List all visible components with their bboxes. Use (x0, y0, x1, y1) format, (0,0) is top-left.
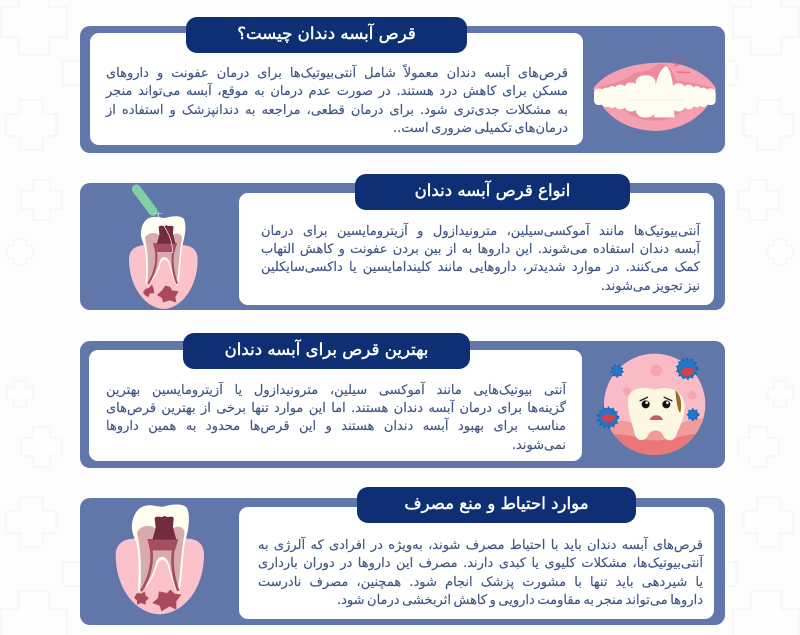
icon: infected tooth root (116, 504, 204, 614)
heading: موارد احتیاط و منع مصرف (404, 494, 589, 513)
body text: یا شیردهی باید تنها با مشورت پزشک انجام شود. همچنین، مصرف نادرست (258, 575, 703, 590)
body text: نمی‌شوند. (512, 438, 566, 453)
heading: انواع قرص آبسه دندان (415, 181, 570, 200)
body text: گزینه‌ها برای درمان آبسه دندان هستند. اما این موارد تنها برخی از بهترین قرص‌های (106, 401, 566, 416)
text card (90, 33, 583, 145)
body text: مناسب برای بهبود آبسه دندان هستند و این قرص‌ها محدود به همین داروها (106, 419, 566, 434)
body text: قرص‌های آبسه دندان معمولاً شامل آنتی‌بیوتیک‌ها برای درمان عفونت و داروهای (106, 66, 568, 81)
panel background (80, 341, 725, 468)
panel background (80, 26, 725, 153)
icon: tooth with root canal file (129, 184, 198, 309)
body text: قرص‌های آبسه دندان باید با احتیاط مصرف شوند، به‌ویژه در افرادی که آلرژی به (258, 538, 703, 553)
body text: به مشکلات جدی‌تری شود. برای درمان قطعی، مراجعه به دندانپزشک و استفاده از (106, 103, 568, 118)
text card (89, 350, 582, 461)
body text: آنتی‌بیوتیک‌ها مانند آموکسی‌سیلین، مترونیدازول و آزیترومایسین برای درمان (261, 224, 700, 238)
panel: precautions and contraindications (80, 487, 725, 625)
body text: نیز تجویز می‌شوند. (601, 279, 700, 294)
body text: آنتی‌بیوتیک‌ها، مشکلات کلیوی یا کبدی دارند. مصرف این داروها در دوران بارداری (258, 556, 703, 571)
panel background (80, 498, 725, 625)
body text (261, 222, 701, 294)
body text: درمان‌های تکمیلی ضروری است.. (393, 121, 568, 136)
heading (355, 174, 630, 210)
panel: best abscess tablet (80, 333, 725, 468)
heading (183, 333, 470, 369)
body text (105, 64, 568, 136)
body text (258, 536, 704, 608)
body text (106, 382, 567, 453)
heading (186, 17, 467, 53)
panel: types of abscess tablets (80, 174, 725, 310)
body text: آنتی بیوتیک‌هایی مانند آموکسی سیلین، مترونیدازول یا آزیترومایسین بهترین (106, 382, 566, 398)
body text: داروها می‌تواند منجر به مقاومت دارویی و کاهش اثربخشی درمان شود. (337, 593, 703, 608)
text card (239, 507, 714, 619)
panel background (80, 183, 725, 310)
icon: gums and teeth (593, 53, 716, 131)
heading: قرص آبسه دندان چیست؟ (237, 24, 416, 43)
body text: آبسه دندان استفاده می‌شوند. این داروها به از بین بردن عفونت و کاهش التهاب (261, 242, 700, 257)
text card (239, 193, 714, 305)
body text: کمک می‌کنند. در موارد شدیدتر، داروهایی مانند کلیندامایسین یا داکسی‌سایکلین (261, 260, 700, 275)
panel: what is an abscess tablet (80, 17, 725, 153)
heading: بهترین قرص برای آبسه دندان (225, 340, 428, 359)
heading (357, 487, 636, 523)
icon: sad decayed tooth with germs (596, 354, 706, 455)
body text: مسکن برای کاهش درد هستند. در صورت عدم درمان به موقع، آبسه می‌تواند منجر (106, 84, 568, 99)
